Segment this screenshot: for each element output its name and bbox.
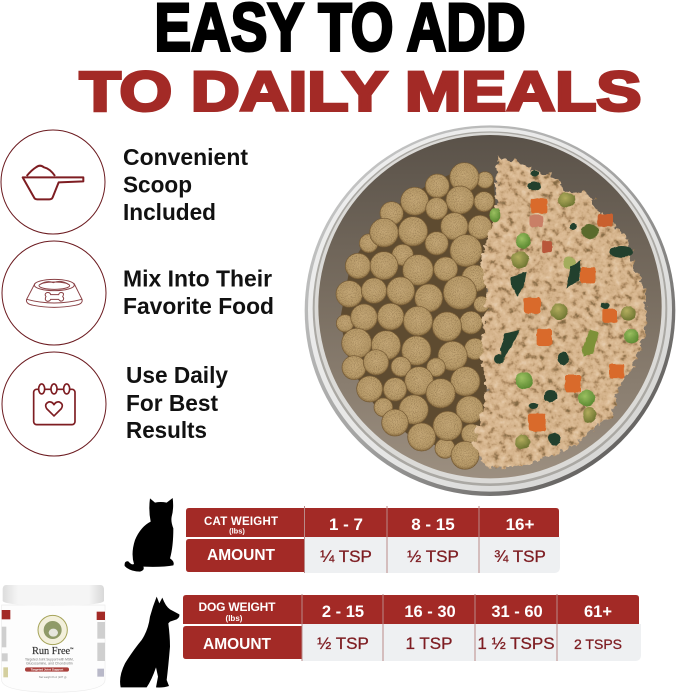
panel: benefits list: [1, 130, 274, 456]
cat table amount cells: [304, 537, 560, 573]
dog amounts: 1 TSP: [406, 634, 452, 653]
text: mix into food: [123, 266, 274, 319]
text: use daily: Use Daily: [126, 362, 228, 388]
jar body: [2, 605, 105, 692]
title line 2: TO DAILY MEALS: [80, 60, 642, 122]
dog amounts: ½ TSP: [317, 634, 369, 653]
kibble shadow mass: [340, 170, 497, 460]
cat silhouette: [125, 498, 174, 572]
kibble pile: [336, 163, 494, 469]
column dividers: [304, 506, 479, 573]
cat amounts: [320, 547, 546, 566]
text: convenient scoop: Scoop: [123, 172, 192, 198]
jar description: Glucosamine, and Chondroitin: [26, 662, 73, 666]
dog weights: 31 - 60: [491, 603, 543, 621]
peas: [490, 193, 639, 449]
text: mix into food: Mix Into Their: [123, 266, 272, 292]
dog weight label: [198, 600, 276, 623]
cat amounts: ½ TSP: [407, 547, 459, 566]
dog amounts: 1 ½ TSPS: [477, 634, 555, 653]
dog amounts: 2 TSPS: [574, 636, 622, 652]
icon: calendar with heart: [2, 352, 106, 456]
cat weight label: (lbs): [229, 526, 245, 536]
text: convenient scoop: Included: [123, 199, 216, 225]
table: cat dosage: [186, 506, 560, 573]
product jar: [2, 585, 105, 692]
text: convenient scoop: [123, 144, 248, 225]
kale: [494, 171, 633, 445]
column dividers: [302, 594, 557, 661]
jar description: [25, 658, 74, 666]
text: use daily: For Best: [126, 390, 218, 416]
jar red pill: Targeted Joint Support: [31, 668, 63, 672]
cat weights: 8 - 15: [411, 515, 455, 534]
text: use daily: Results: [126, 417, 207, 443]
icon: food bowl: [2, 241, 106, 345]
dog weight label: DOG WEIGHT: [198, 600, 276, 614]
jar product name: Run Free: [32, 646, 70, 657]
text: use daily: [126, 362, 228, 443]
jar lid: [3, 585, 104, 606]
dog silhouette: [120, 597, 179, 687]
dog table header row: [183, 595, 639, 624]
dog amounts: [317, 634, 622, 653]
icon: scoop: [1, 130, 105, 234]
text: mix into food: Favorite Food: [123, 293, 274, 319]
cat table header row: [186, 508, 559, 537]
photo: steel bowl with kibble and fresh food: [305, 125, 675, 496]
jar net weight: Net weight 8 oz (227 g): [39, 675, 67, 679]
cat weights: 16+: [506, 515, 534, 534]
jar description: Targeted Joint Support with MSM,: [25, 658, 74, 662]
dog table amount label cell: AMOUNT: [203, 636, 272, 653]
cat weight label: CAT WEIGHT: [204, 516, 278, 528]
cat weights: [329, 515, 534, 534]
dog weight label: (lbs): [226, 614, 243, 623]
dog weights: 16 - 30: [404, 603, 456, 621]
title: [80, 0, 642, 122]
jar side labels: [2, 610, 105, 620]
jar product name: ™: [70, 647, 74, 651]
jar side text: [2, 622, 105, 677]
cat table amount label cell: AMOUNT: [207, 547, 276, 564]
fresh food mass: [473, 157, 647, 467]
cat weights: 1 - 7: [329, 515, 363, 534]
jar logo: [38, 615, 67, 645]
dog weights: 61+: [584, 603, 612, 621]
dog weights: 2 - 15: [322, 603, 364, 621]
vegetables: [490, 171, 639, 449]
cat table amount label cell: [186, 539, 305, 572]
dog table amount label cell: [183, 626, 302, 659]
bowl rim: [305, 125, 675, 496]
cat amounts: ¼ TSP: [320, 547, 372, 566]
carrots: [523, 199, 624, 431]
cat weight label: [204, 516, 278, 536]
table: dog dosage: [183, 594, 641, 661]
dog weights: [322, 603, 612, 621]
cat amounts: ¾ TSP: [494, 547, 546, 566]
dog table amount cells: [302, 624, 641, 661]
text: convenient scoop: Convenient: [123, 144, 248, 170]
